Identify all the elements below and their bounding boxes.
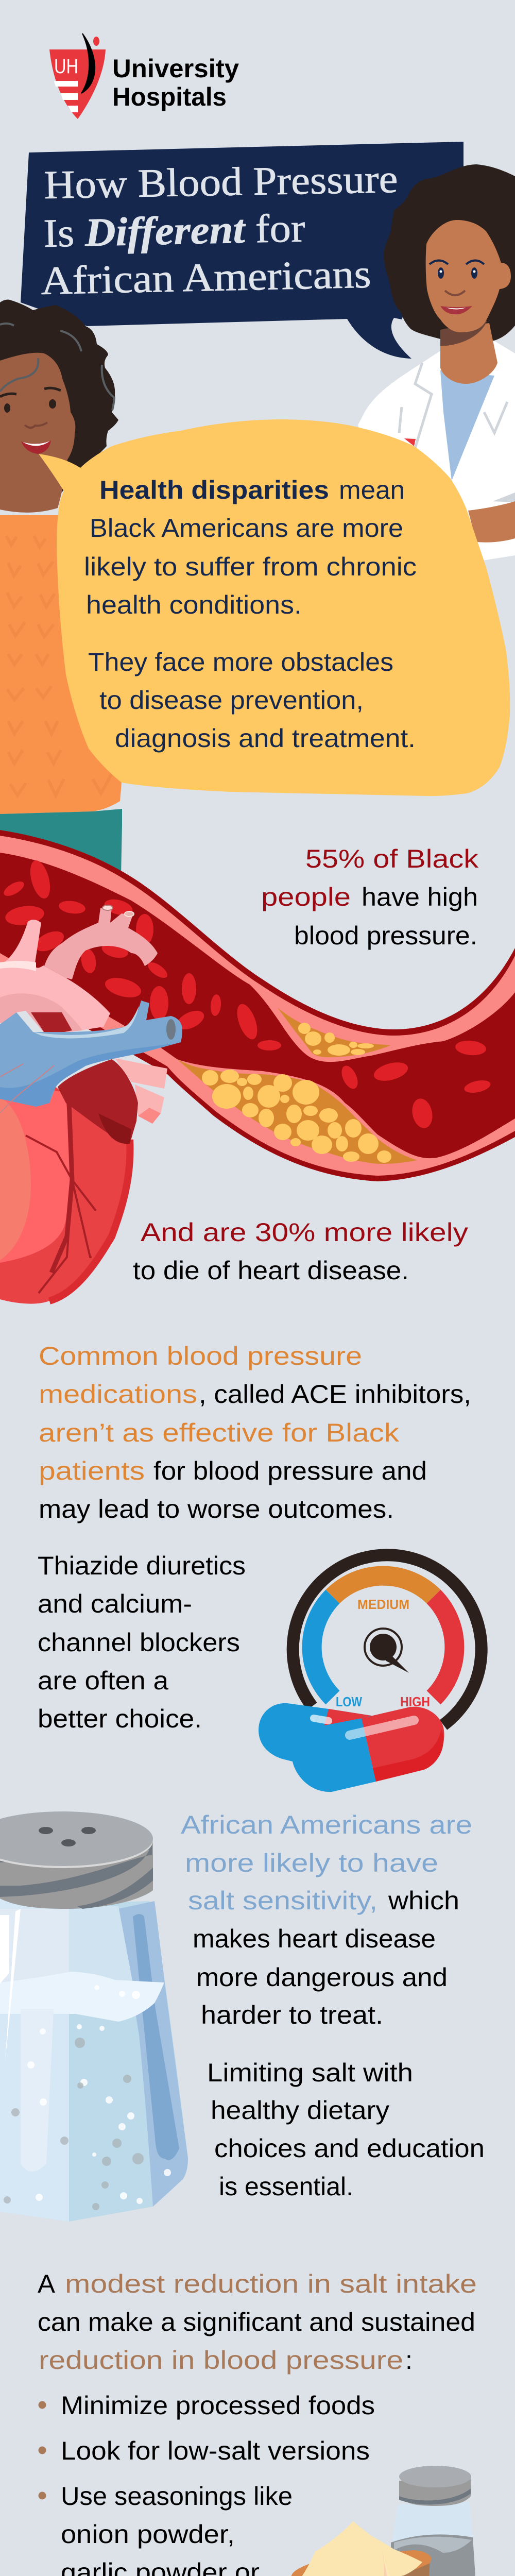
text: salt sensitivity: is essential. <box>219 2172 353 2201</box>
list: salt reduction tips: Look for low-salt versions <box>61 2436 370 2465</box>
text: health disparities <box>84 476 417 753</box>
aorta arch <box>44 907 158 979</box>
text: salt sensitivity: Limiting salt with <box>207 2058 413 2087</box>
text: health disparities: diagnosis and treatment. <box>115 724 416 753</box>
text: salt sensitivity <box>181 1810 485 2201</box>
chevron pattern <box>6 536 112 795</box>
text: thiazide diuretics: channel blockers <box>38 1628 240 1657</box>
illustration: capsules <box>259 1703 444 1792</box>
text: thiazide diuretics: and calcium- <box>38 1589 192 1618</box>
stat: 55 percent: 55% of Black <box>305 844 479 873</box>
title: How Blood Pressure <box>44 156 398 207</box>
text: health disparities: health conditions. <box>86 590 302 619</box>
text: health disparities: Black Americans are more <box>90 514 403 543</box>
list: salt reduction tips: Use seasonings like <box>61 2482 293 2511</box>
stat: 55 percent: blood pressure. <box>294 921 477 950</box>
text: modest reduction: modest reduction in salt intake <box>65 2269 477 2298</box>
illustration: blood pressure gauge <box>293 1555 482 1725</box>
logo: University Hospitals top: UH <box>54 55 78 78</box>
stat: 55 percent: have high <box>362 883 478 911</box>
yellow speech bubble <box>39 419 510 796</box>
text: medications: medications <box>39 1380 197 1409</box>
illustration: salt shaker <box>0 1811 188 2222</box>
vena cava <box>0 1001 182 1107</box>
text: salt sensitivity: more likely to have <box>185 1849 438 1877</box>
text: thiazide diuretics: Thiazide diuretics <box>38 1551 246 1580</box>
text: salt sensitivity: which <box>388 1886 459 1915</box>
stat: 30 percent <box>133 1218 468 1285</box>
text: salt sensitivity: harder to treat. <box>201 2001 383 2029</box>
list: salt reduction tips <box>38 2391 375 2576</box>
text: modest reduction: : <box>405 2346 413 2375</box>
text: medications: aren’t as effective for Black <box>39 1418 400 1447</box>
text: health disparities: They face more obstacles <box>88 648 393 676</box>
illustration: woman in orange shirt <box>0 300 122 876</box>
list: salt reduction tips: onion powder, <box>61 2520 235 2549</box>
text: salt sensitivity: makes heart disease <box>193 1924 436 1953</box>
text: medications: patients <box>39 1456 145 1485</box>
title: African Americans <box>41 251 371 303</box>
text: salt sensitivity: choices and education <box>214 2134 485 2163</box>
illustration: female doctor <box>358 164 515 561</box>
text: medications <box>39 1342 471 1523</box>
stat: 55 percent: people <box>261 883 351 911</box>
illustration: blood pressure gauge: MEDIUM <box>357 1597 409 1612</box>
plaque deposits <box>177 1008 417 1164</box>
title speech bubble <box>21 142 464 359</box>
text: modest reduction: reduction in blood pressure <box>39 2346 403 2375</box>
text: thiazide diuretics <box>38 1551 246 1733</box>
text: salt sensitivity: salt sensitivity, <box>188 1886 377 1915</box>
text: health disparities: mean <box>339 476 405 504</box>
text: medications: may lead to worse outcomes. <box>39 1495 394 1523</box>
logo: University Hospitals top <box>49 33 239 119</box>
illustration: artery with plaque <box>0 830 515 1181</box>
illustration: blood pressure gauge: LOW <box>336 1694 362 1709</box>
red blood cells <box>2 858 492 1130</box>
list: salt reduction tips: Minimize processed foods <box>61 2391 375 2420</box>
illustration: seasonings <box>291 2466 478 2576</box>
stat: 55 percent <box>261 844 479 950</box>
text: salt sensitivity: African Americans are <box>181 1810 472 1839</box>
text: thiazide diuretics: better choice. <box>38 1704 202 1733</box>
illustration: blood pressure gauge: HIGH <box>400 1694 430 1709</box>
text: salt sensitivity: healthy dietary <box>211 2096 389 2125</box>
text: medications: Common blood pressure <box>39 1342 362 1370</box>
illustration: heart <box>0 905 182 1304</box>
text: medications: , called ACE inhibitors, <box>199 1380 471 1409</box>
logo: University Hospitals top: University <box>112 54 239 83</box>
text: modest reduction: can make a significant and sustained <box>38 2308 475 2336</box>
text: health disparities: likely to suffer from chronic <box>84 552 417 581</box>
text: modest reduction <box>38 2269 477 2375</box>
title: Is Different for <box>43 205 305 256</box>
text: thiazide diuretics: are often a <box>38 1666 168 1695</box>
stat: 30 percent: to die of heart disease. <box>133 1256 409 1285</box>
text: medications: for blood pressure and <box>153 1456 427 1485</box>
logo: University Hospitals top: Hospitals <box>112 82 227 111</box>
stat: 30 percent: And are 30% more likely <box>141 1218 468 1247</box>
text: health disparities: Health disparities <box>99 476 329 504</box>
title <box>41 156 398 303</box>
text: modest reduction: A <box>38 2269 56 2298</box>
text: salt sensitivity: more dangerous and <box>196 1963 448 1992</box>
text: health disparities: to disease prevention, <box>99 686 364 715</box>
